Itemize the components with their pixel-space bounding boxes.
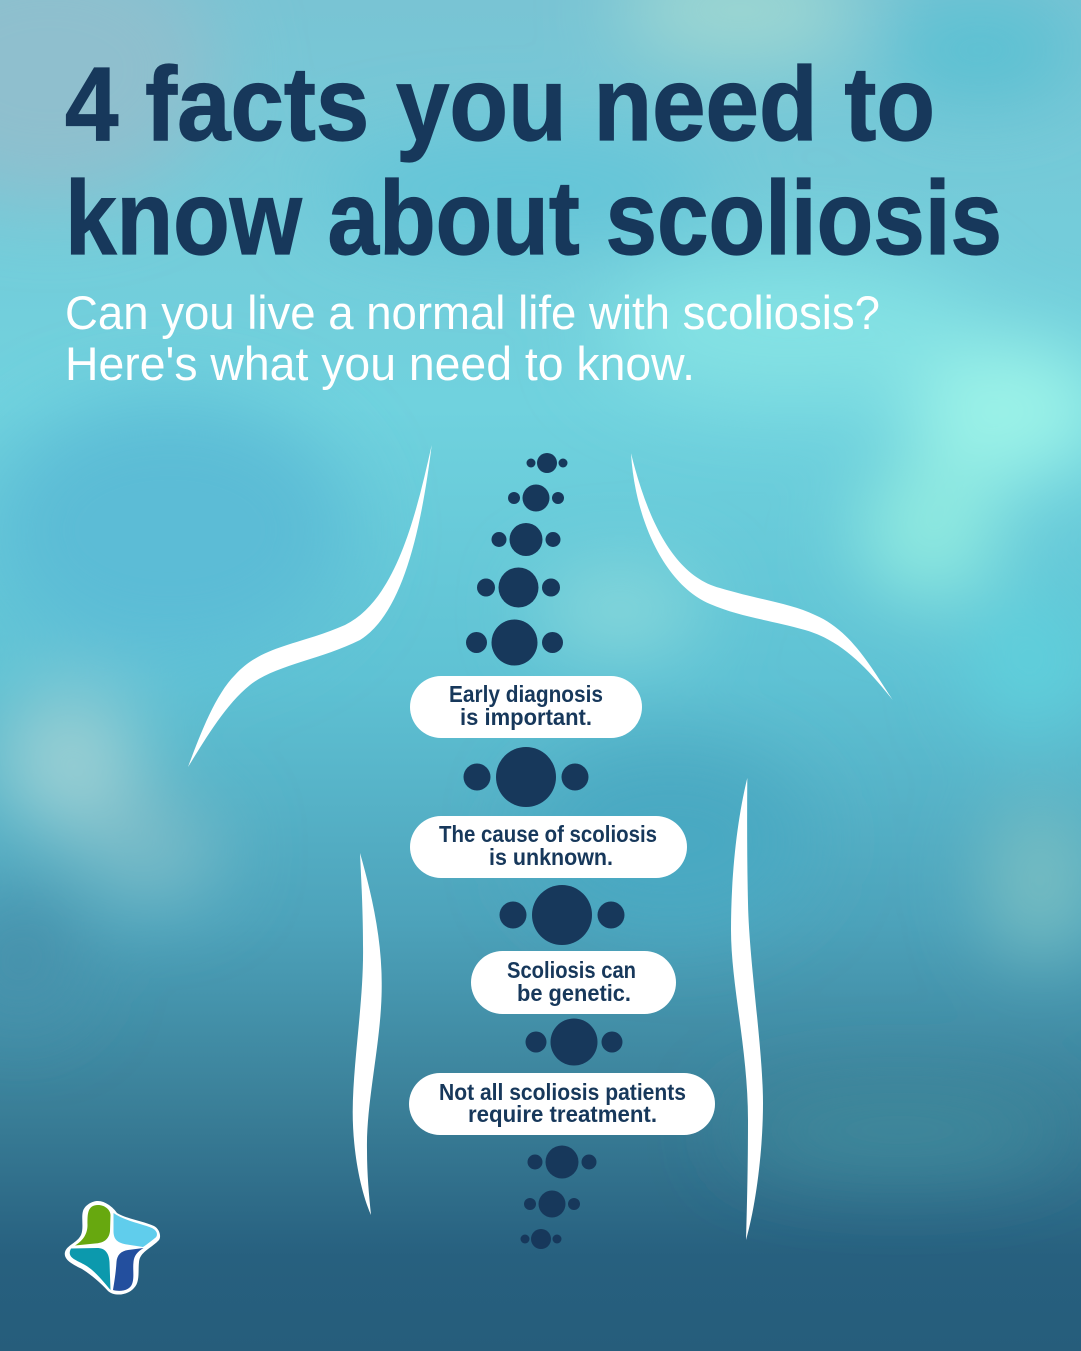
fact 1 pill: [410, 676, 642, 738]
fact 1 pill: is important.: [460, 704, 592, 730]
right waist: [731, 778, 763, 1240]
fact 2 pill: [410, 816, 687, 878]
vertebra 7: [500, 885, 624, 945]
title: 4 facts you need to: [65, 46, 935, 163]
fact 3 pill: [471, 951, 676, 1014]
title: [65, 46, 1002, 277]
vertebra 11: [520, 1229, 562, 1249]
left waist: [353, 853, 382, 1215]
subtitle: Can you live a normal life with scoliosis?: [65, 286, 880, 339]
vertebra 3: [492, 523, 560, 556]
fact 3 pill: Scoliosis can: [507, 957, 636, 983]
subtitle: [65, 286, 880, 390]
right shoulder: [631, 453, 893, 700]
vertebra 6: [464, 747, 588, 807]
fact 2 pill: is unknown.: [489, 844, 613, 870]
vertebra 2: [508, 484, 564, 512]
vertebra 4: [477, 568, 560, 608]
vertebra 1: [526, 453, 568, 473]
body outline: [188, 445, 893, 1240]
vertebra 9: [528, 1146, 596, 1178]
fact 1 pill: Early diagnosis: [449, 681, 603, 707]
spine: [464, 453, 624, 1249]
fact 3 pill: be genetic.: [517, 980, 631, 1006]
fact 4 pill: Not all scoliosis patients: [439, 1079, 686, 1105]
vertebra 10: [524, 1190, 580, 1218]
fact 4 pill: require treatment.: [468, 1101, 657, 1127]
left shoulder: [188, 445, 432, 767]
subtitle: Here's what you need to know.: [65, 337, 695, 390]
fact 2 pill: The cause of scoliosis: [439, 821, 657, 847]
logo: [65, 1201, 160, 1295]
vertebra 5: [466, 620, 563, 666]
vertebra 8: [526, 1018, 622, 1066]
fact 4 pill: [409, 1073, 715, 1135]
